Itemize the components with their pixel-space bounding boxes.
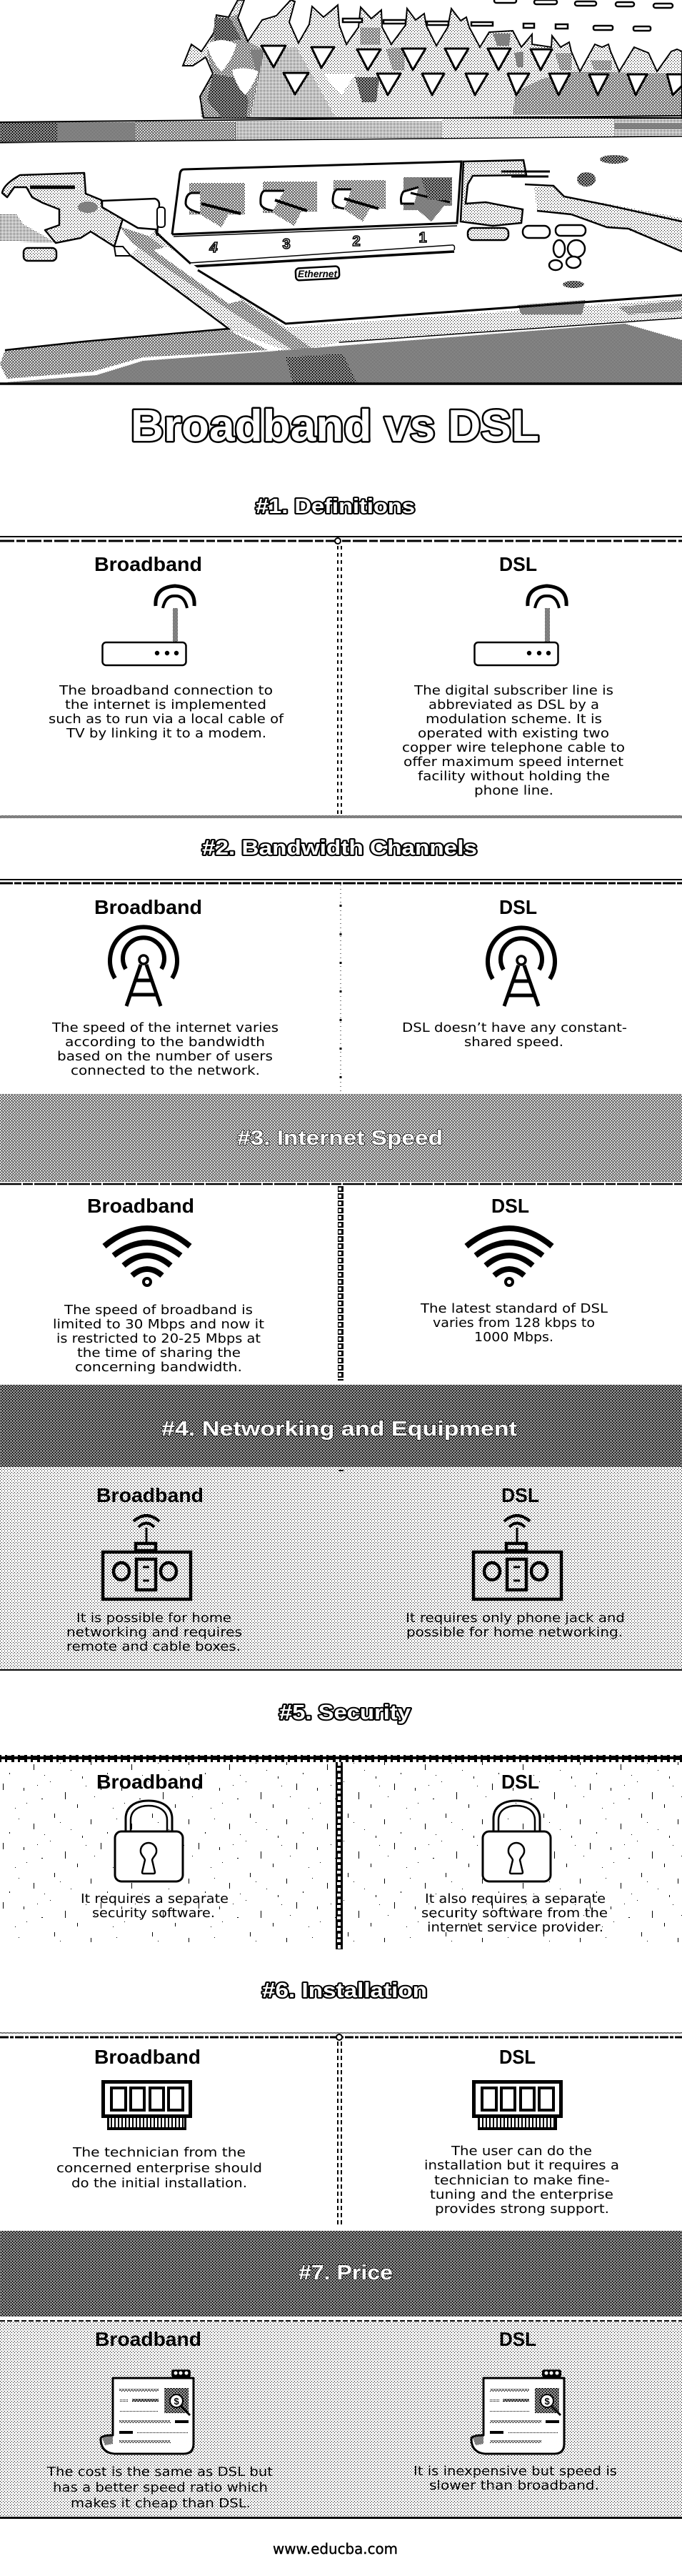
column header: DSL: DSL (491, 1195, 529, 1217)
icon: invoice DSL: $ (544, 2396, 550, 2407)
dark spots (563, 155, 628, 288)
text: broadband installation: concerned enterprise should (56, 2161, 262, 2176)
pegboard holes (207, 40, 682, 95)
column header: broadband: Broadband (87, 1195, 194, 1217)
text: broadband equipment: It is possible for home (76, 1611, 231, 1626)
text: DSL speed: The latest standard of DSL (420, 1301, 608, 1316)
text: DSL speed: 1000 Mbps. (474, 1330, 553, 1345)
text: DSL installation: The user can do the (451, 2144, 592, 2159)
text: broadband price: makes it cheap than DSL. (71, 2496, 251, 2511)
text: DSL price: It is inexpensive but speed is (413, 2464, 617, 2479)
icon: router broadband (103, 586, 194, 666)
port numbers: 3 (282, 237, 291, 252)
port numbers: 1 (418, 230, 427, 246)
ethernet cable and table edge (5, 227, 682, 354)
band: internet speed (0, 1094, 682, 1182)
port numbers (209, 230, 427, 256)
icon: invoice broadband: $ (174, 2396, 180, 2407)
heading: bandwidth channels: #2. Bandwidth Channels (202, 837, 477, 860)
text: DSL price: slower than broadband. (429, 2478, 599, 2493)
icon: radio receiver broadband (103, 1516, 191, 1599)
icon: antenna tower broadband (110, 927, 177, 1006)
panel rules (0, 1184, 682, 1381)
text: broadband definition: the internet is implemented (65, 697, 266, 712)
text: broadband speed: is restricted to 20-25 Mbps at (56, 1331, 261, 1346)
text: broadband security (81, 1891, 229, 1921)
text: DSL security: It also requires a separate (425, 1891, 606, 1906)
text: broadband installation (56, 2145, 262, 2191)
column header: broadband: Broadband (96, 1484, 204, 1506)
column header: broadband: Broadband (94, 2046, 201, 2068)
panel rules (0, 2032, 682, 2224)
text: DSL security: security software from the (421, 1906, 608, 1921)
text: DSL installation (424, 2144, 619, 2217)
port numbers: 2 (352, 234, 361, 249)
right connector (461, 160, 682, 252)
switch base lines (189, 245, 454, 267)
text: DSL speed (420, 1301, 608, 1345)
hero photo: ethernet switch on a pegboard (0, 0, 682, 384)
port 1 (401, 177, 452, 222)
text: broadband bandwidth: based on the number of users (57, 1049, 273, 1064)
pegboard body (183, 0, 682, 118)
icon: invoice DSL (471, 2369, 564, 2454)
icon: invoice broadband (101, 2369, 194, 2454)
column header: DSL: DSL (499, 2046, 536, 2068)
text: broadband definition: such as to run via a local cable of (49, 712, 284, 727)
heading: price: #7. Price (299, 2262, 393, 2284)
text: DSL installation: installation but it requires a (424, 2158, 619, 2173)
wall dashes (343, 0, 673, 31)
icon: memory module DSL (474, 2082, 561, 2130)
column header: DSL: DSL (499, 896, 537, 918)
heading: internet speed: #3. Internet Speed (237, 1127, 443, 1150)
icon: wifi DSL (466, 1228, 552, 1285)
text: DSL definition: abbreviated as DSL by a (428, 697, 599, 712)
text: DSL definition: phone line. (474, 783, 553, 798)
text: broadband bandwidth: The speed of the internet varies (51, 1020, 279, 1035)
port 3 (261, 181, 317, 226)
icon: radio receiver DSL (473, 1516, 561, 1599)
text: DSL bandwidth: shared speed. (464, 1035, 563, 1050)
title: Broadband vs DSL (131, 402, 539, 451)
panel: internet speed (0, 1184, 682, 1381)
text: DSL security: internet service provider. (427, 1920, 603, 1935)
text: broadband speed: The speed of broadband is (64, 1303, 253, 1318)
text: DSL equipment: It requires only phone jack and (406, 1611, 625, 1626)
icon: memory module broadband (103, 2082, 190, 2130)
text: broadband security: It requires a separate (81, 1891, 229, 1906)
heading: definitions: #1. Definitions (256, 495, 415, 518)
column header: broadband: Broadband (94, 553, 202, 575)
text: DSL equipment: possible for home networking. (406, 1625, 623, 1640)
band: price (0, 2231, 682, 2317)
text: broadband bandwidth (51, 1020, 279, 1078)
left cable connector (0, 173, 165, 261)
text: DSL definition (402, 683, 625, 798)
column header: DSL: DSL (499, 553, 537, 575)
icon: router DSL (474, 586, 566, 666)
text: broadband installation: do the initial installation. (71, 2176, 247, 2191)
text: DSL installation: technician to make fine- (434, 2173, 610, 2188)
panel: definitions (0, 537, 682, 818)
ethernet label: Ethernet (298, 268, 338, 279)
icon: padlock DSL (483, 1801, 551, 1881)
text: broadband equipment: remote and cable boxes. (66, 1639, 241, 1654)
text: broadband speed: limited to 30 Mbps and now it (53, 1317, 264, 1332)
heading: networking and equipment: #4. Networking and Equipment (161, 1418, 517, 1441)
text: DSL definition: operated with existing two (418, 726, 609, 741)
text: broadband bandwidth: connected to the network. (71, 1063, 260, 1078)
small blobs (468, 225, 586, 270)
port numbers: 4 (209, 240, 218, 256)
band: networking and equipment (0, 1385, 682, 1467)
panel: price (0, 2321, 682, 2519)
column header: DSL: DSL (501, 1771, 539, 1793)
panel rules (0, 537, 682, 818)
column header: broadband: Broadband (95, 2328, 201, 2350)
heading: security: #5. Security (279, 1701, 411, 1724)
panel: networking and equipment (0, 1467, 682, 1670)
column header: broadband: Broadband (96, 1771, 204, 1793)
port 2 (333, 180, 386, 222)
text: DSL definition: The digital subscriber line is (413, 683, 613, 698)
text: broadband bandwidth: according to the bandwidth (65, 1035, 265, 1050)
text: broadband speed: concerning bandwidth. (75, 1360, 242, 1375)
text: DSL installation: tuning and the enterprise (430, 2187, 613, 2202)
text: broadband definition: TV by linking it to a modem. (66, 726, 266, 741)
footer url: www.educba.com (273, 2540, 398, 2557)
table surface shadow (0, 324, 682, 384)
text: broadband equipment: networking and requires (66, 1625, 242, 1640)
text: DSL definition: offer maximum speed internet (403, 755, 623, 770)
column header: DSL: DSL (501, 1484, 539, 1506)
icon: padlock broadband (115, 1801, 183, 1881)
text: broadband speed (53, 1303, 264, 1375)
text: broadband speed: the time of sharing the (77, 1346, 241, 1361)
column header: DSL: DSL (499, 2328, 536, 2350)
text: DSL equipment (406, 1611, 625, 1640)
ethernet switch panel (172, 161, 461, 237)
port 4 (186, 183, 245, 227)
text: broadband installation: The technician from the (72, 2145, 246, 2160)
panel: installation (0, 2032, 682, 2224)
text: broadband price: has a better speed ratio which (53, 2480, 268, 2495)
column header: broadband: Broadband (94, 896, 202, 918)
text: DSL definition: copper wire telephone cable to (402, 740, 625, 755)
text: broadband price: The cost is the same as DSL but (46, 2465, 273, 2480)
panel rules (0, 880, 682, 1093)
text: DSL definition: modulation scheme. It is (426, 712, 602, 727)
text: broadband definition: The broadband connection to (59, 683, 273, 698)
text: DSL installation: provides strong support. (435, 2202, 609, 2217)
text: DSL security (421, 1891, 608, 1935)
text: broadband definition (49, 683, 284, 741)
shelf edge (0, 116, 682, 143)
text: DSL price (413, 2464, 617, 2493)
panel: security (0, 1755, 682, 1949)
icon: antenna tower DSL (488, 928, 555, 1006)
heading: installation: #6. Installation (262, 1979, 427, 2002)
text: DSL bandwidth (402, 1020, 627, 1050)
text: DSL bandwidth: DSL doesn’t have any constant- (402, 1020, 627, 1035)
text: DSL definition: facility without holding the (418, 769, 610, 784)
text: broadband price (46, 2465, 273, 2511)
text: broadband security: security software. (92, 1906, 215, 1921)
panel: bandwidth channels (0, 880, 682, 1093)
text: DSL speed: varies from 128 kbps to (433, 1316, 595, 1331)
icon: wifi broadband (104, 1228, 190, 1285)
text: broadband equipment (66, 1611, 242, 1654)
